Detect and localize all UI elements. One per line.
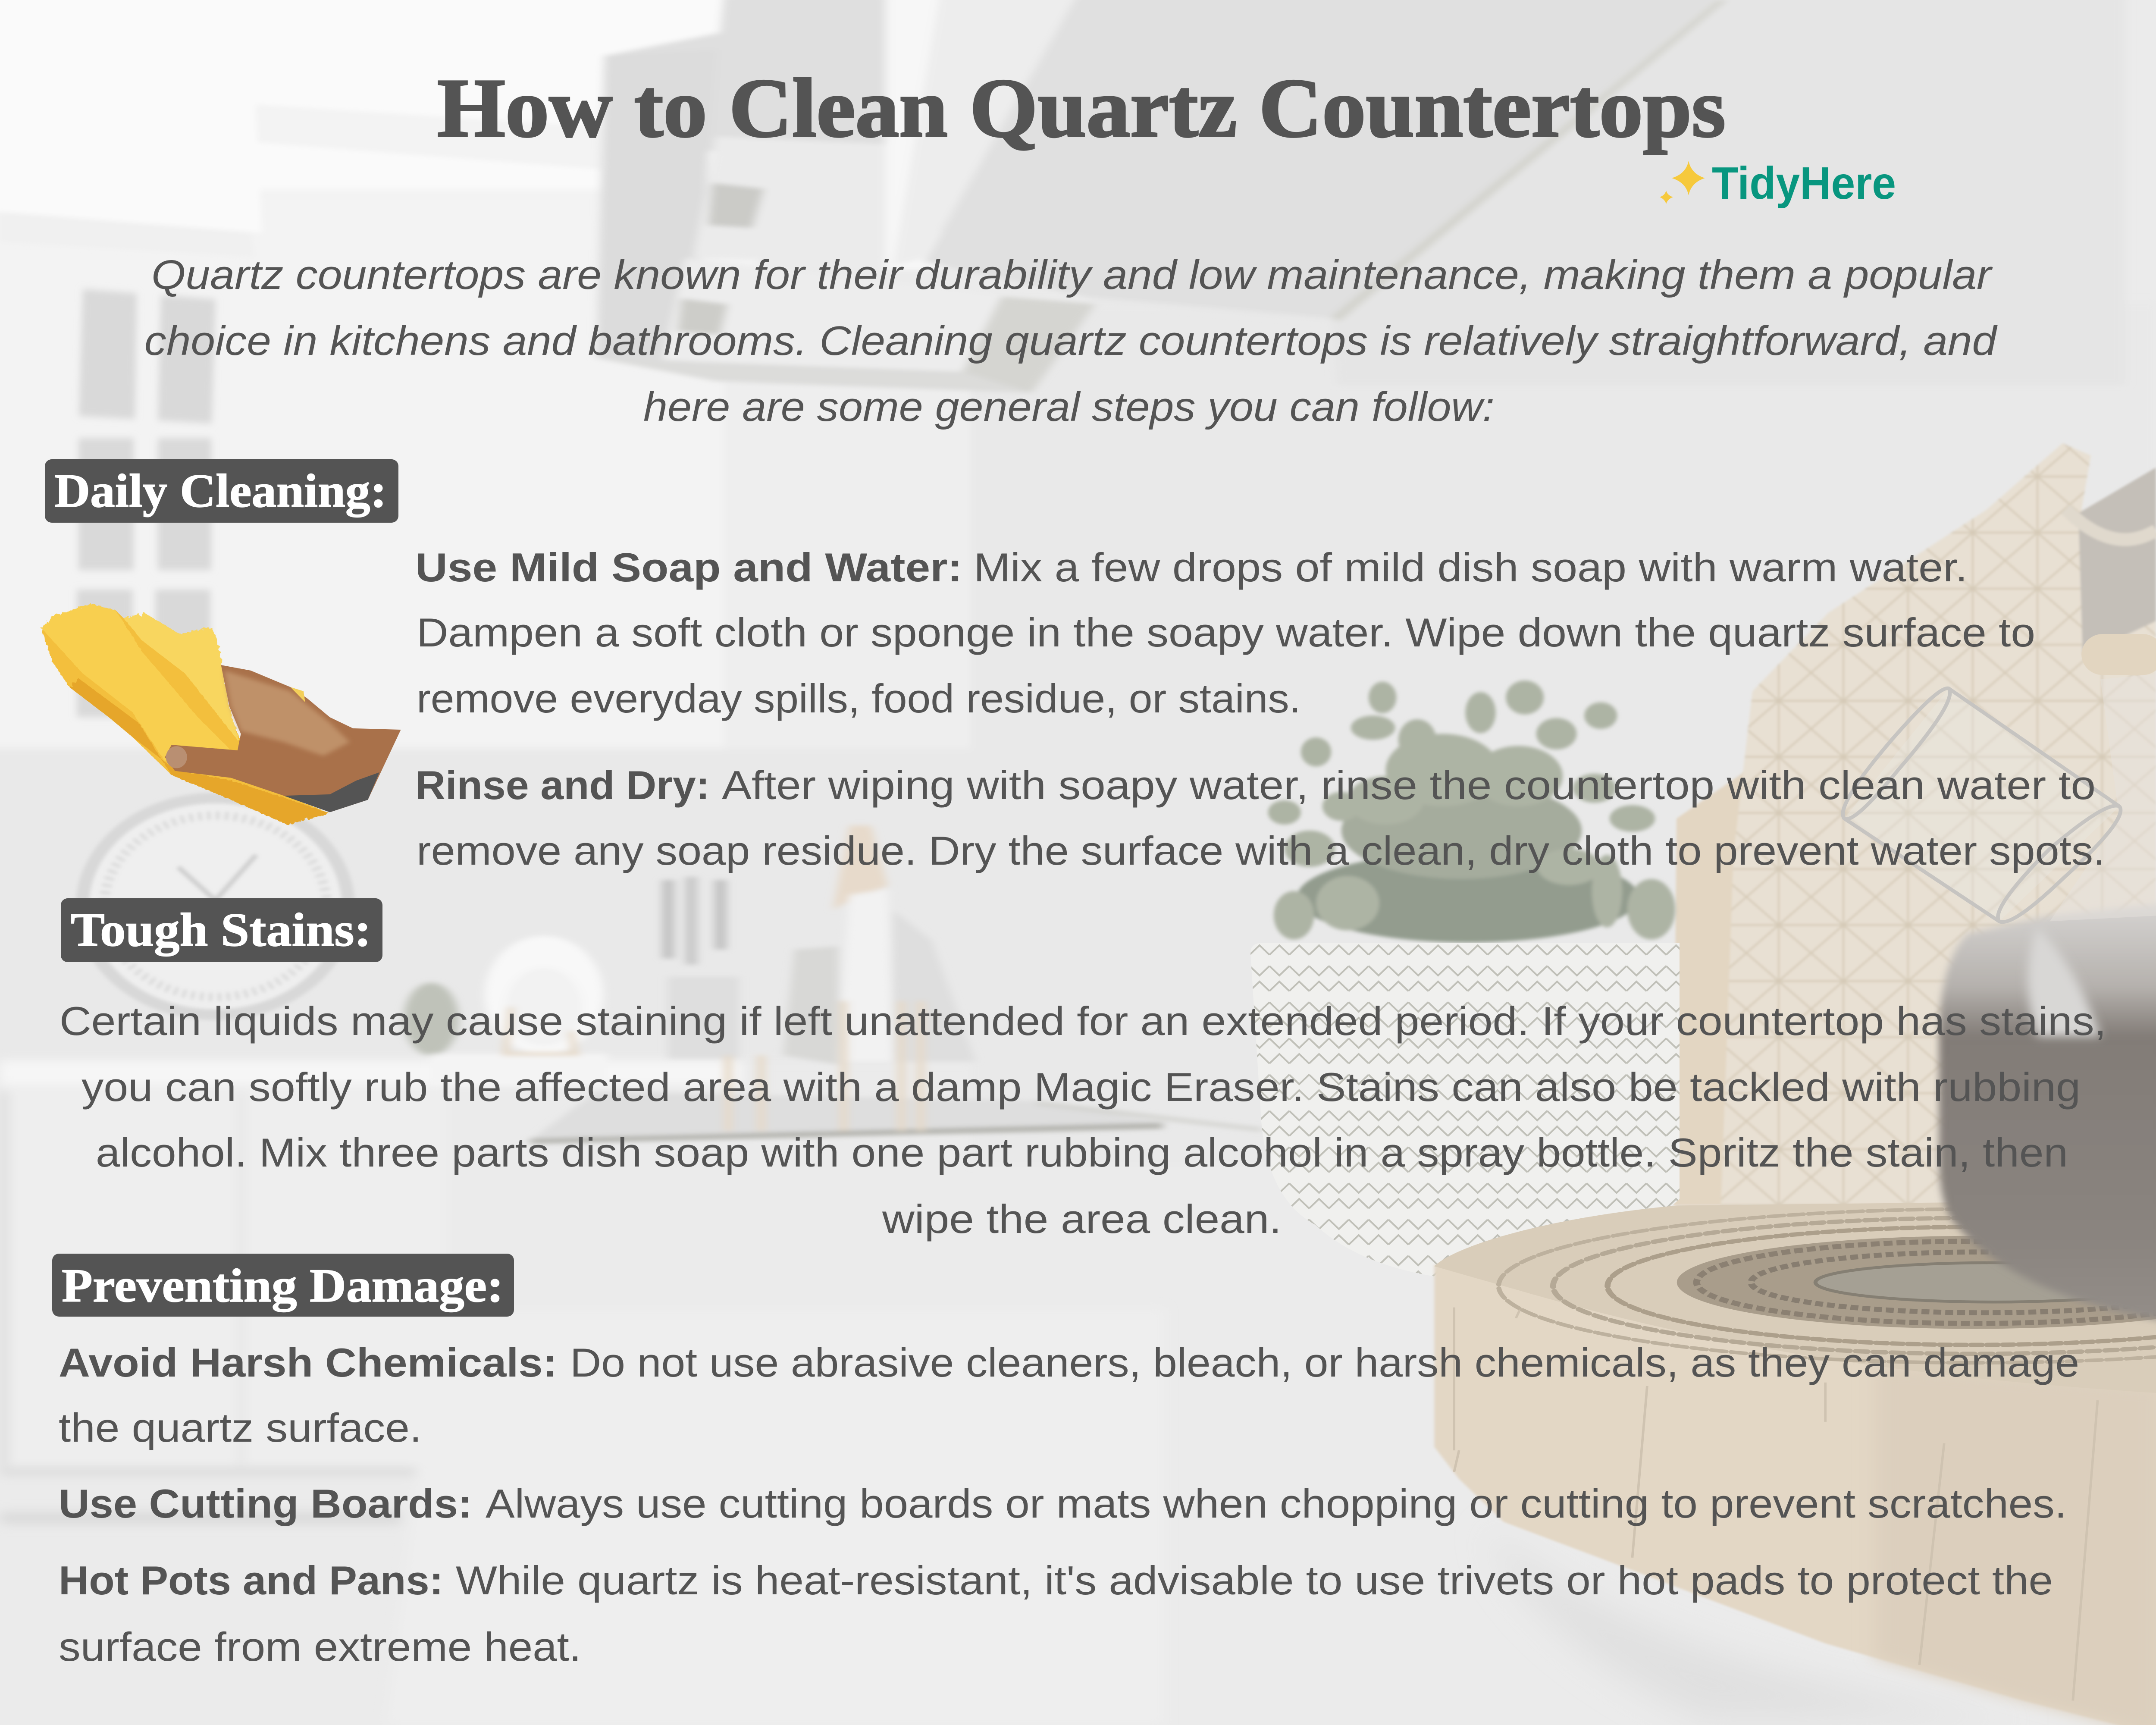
- lower cabinets and counter: [0, 793, 1164, 1725]
- body: Tough Stains text: Certain liquids may cause staining if left unattended for an extended period. If your countertop has stains,: [60, 998, 2106, 1044]
- intro text: Quartz countertops are known for their durability and low maintenance, making them a popular: [151, 252, 1993, 298]
- body: Hot Pots and Pans: While quartz is heat-resistant, it's advisable to use trivets or hot pads to protect the: [456, 1558, 2053, 1603]
- plant: [1268, 681, 1675, 943]
- woven basket: [1250, 943, 1680, 1282]
- icon: hand wiping with yellow cloth: [41, 604, 401, 825]
- range hood: [597, 0, 2125, 393]
- glass jar: [1843, 634, 2156, 1320]
- heading: Daily Cleaning: Daily Cleaning:: [54, 464, 387, 517]
- dishes, utensils and stove: [404, 825, 1262, 1144]
- body: Tough Stains text: alcohol. Mix three parts dish soap with one part rubbing alcohol in a spray bottle. Spritz the stain, then: [96, 1130, 2068, 1175]
- intro text: choice in kitchens and bathrooms. Cleaning quartz countertops is relatively straightforward, and: [144, 318, 1998, 364]
- body: Tough Stains text: [60, 998, 2106, 1242]
- body: Rinse and Dry: remove any soap residue. Dry the surface with a clean, dry cloth to prevent water spots.: [417, 828, 2105, 873]
- body: Avoid Harsh Chemicals: [59, 1340, 2079, 1450]
- intro text: here are some general steps you can follow:: [643, 384, 1495, 430]
- logo wordmark: TidyHere: [1712, 158, 1896, 209]
- body: Hot Pots and Pans: [59, 1558, 2053, 1669]
- body: Tough Stains text: wipe the area clean.: [882, 1196, 1282, 1242]
- icon: sparkles: [1660, 161, 1705, 204]
- intro text: [144, 252, 1998, 430]
- soft shadow under slab: [1488, 1531, 2027, 1721]
- heading: Preventing Damage: Preventing Damage:: [62, 1259, 504, 1312]
- clock: [76, 793, 355, 1020]
- body: Rinse and Dry: Rinse and Dry:: [415, 762, 710, 808]
- crown moulding: [0, 0, 604, 257]
- body: Rinse and Dry: After wiping with soapy water, rinse the countertop with clean water to: [722, 762, 2096, 808]
- body: Tough Stains text: you can softly rub the affected area with a damp Magic Eraser. Stains can also be tackled with rubbing: [81, 1064, 2081, 1110]
- upper cabinets and wall: [0, 0, 2156, 1164]
- body: Use Mild Soap and Water: Use Mild Soap and Water:: [415, 545, 962, 590]
- shot glass: [1843, 688, 2121, 922]
- body: Hot Pots and Pans: surface from extreme heat.: [59, 1624, 581, 1669]
- body: Use Mild Soap and Water: remove everyday spills, food residue, or stains.: [417, 676, 1301, 721]
- body: Avoid Harsh Chemicals: Avoid Harsh Chemicals:: [59, 1340, 557, 1385]
- body: Use Mild Soap and Water: Mix a few drops of mild dish soap with warm water.: [974, 545, 1968, 590]
- body: Hot Pots and Pans: Hot Pots and Pans:: [59, 1558, 443, 1603]
- body: Use Cutting Boards: Always use cutting boards or mats when chopping or cutting to prevent scratches.: [486, 1481, 2067, 1526]
- title: How to Clean Quartz Countertops: [437, 62, 1726, 155]
- wood slab: [1434, 1200, 2156, 1725]
- body: Use Cutting Boards: Use Cutting Boards:: [59, 1481, 472, 1526]
- body: Rinse and Dry: [415, 762, 2105, 873]
- heading: Tough Stains: Tough Stains:: [71, 903, 371, 956]
- pillow: [1721, 443, 2156, 1208]
- body: Avoid Harsh Chemicals: Do not use abrasive cleaners, bleach, or harsh chemicals, as they can damage: [570, 1340, 2079, 1385]
- wooden board behind plant: [1673, 768, 1751, 1206]
- body: Use Mild Soap and Water: [415, 545, 2035, 721]
- logo: TidyHere: [1660, 158, 1896, 209]
- cabinet window panes: [77, 289, 216, 717]
- body: Use Mild Soap and Water: Dampen a soft cloth or sponge in the soapy water. Wipe down the quartz surface to: [417, 610, 2035, 655]
- body: Avoid Harsh Chemicals: the quartz surface.: [59, 1405, 422, 1450]
